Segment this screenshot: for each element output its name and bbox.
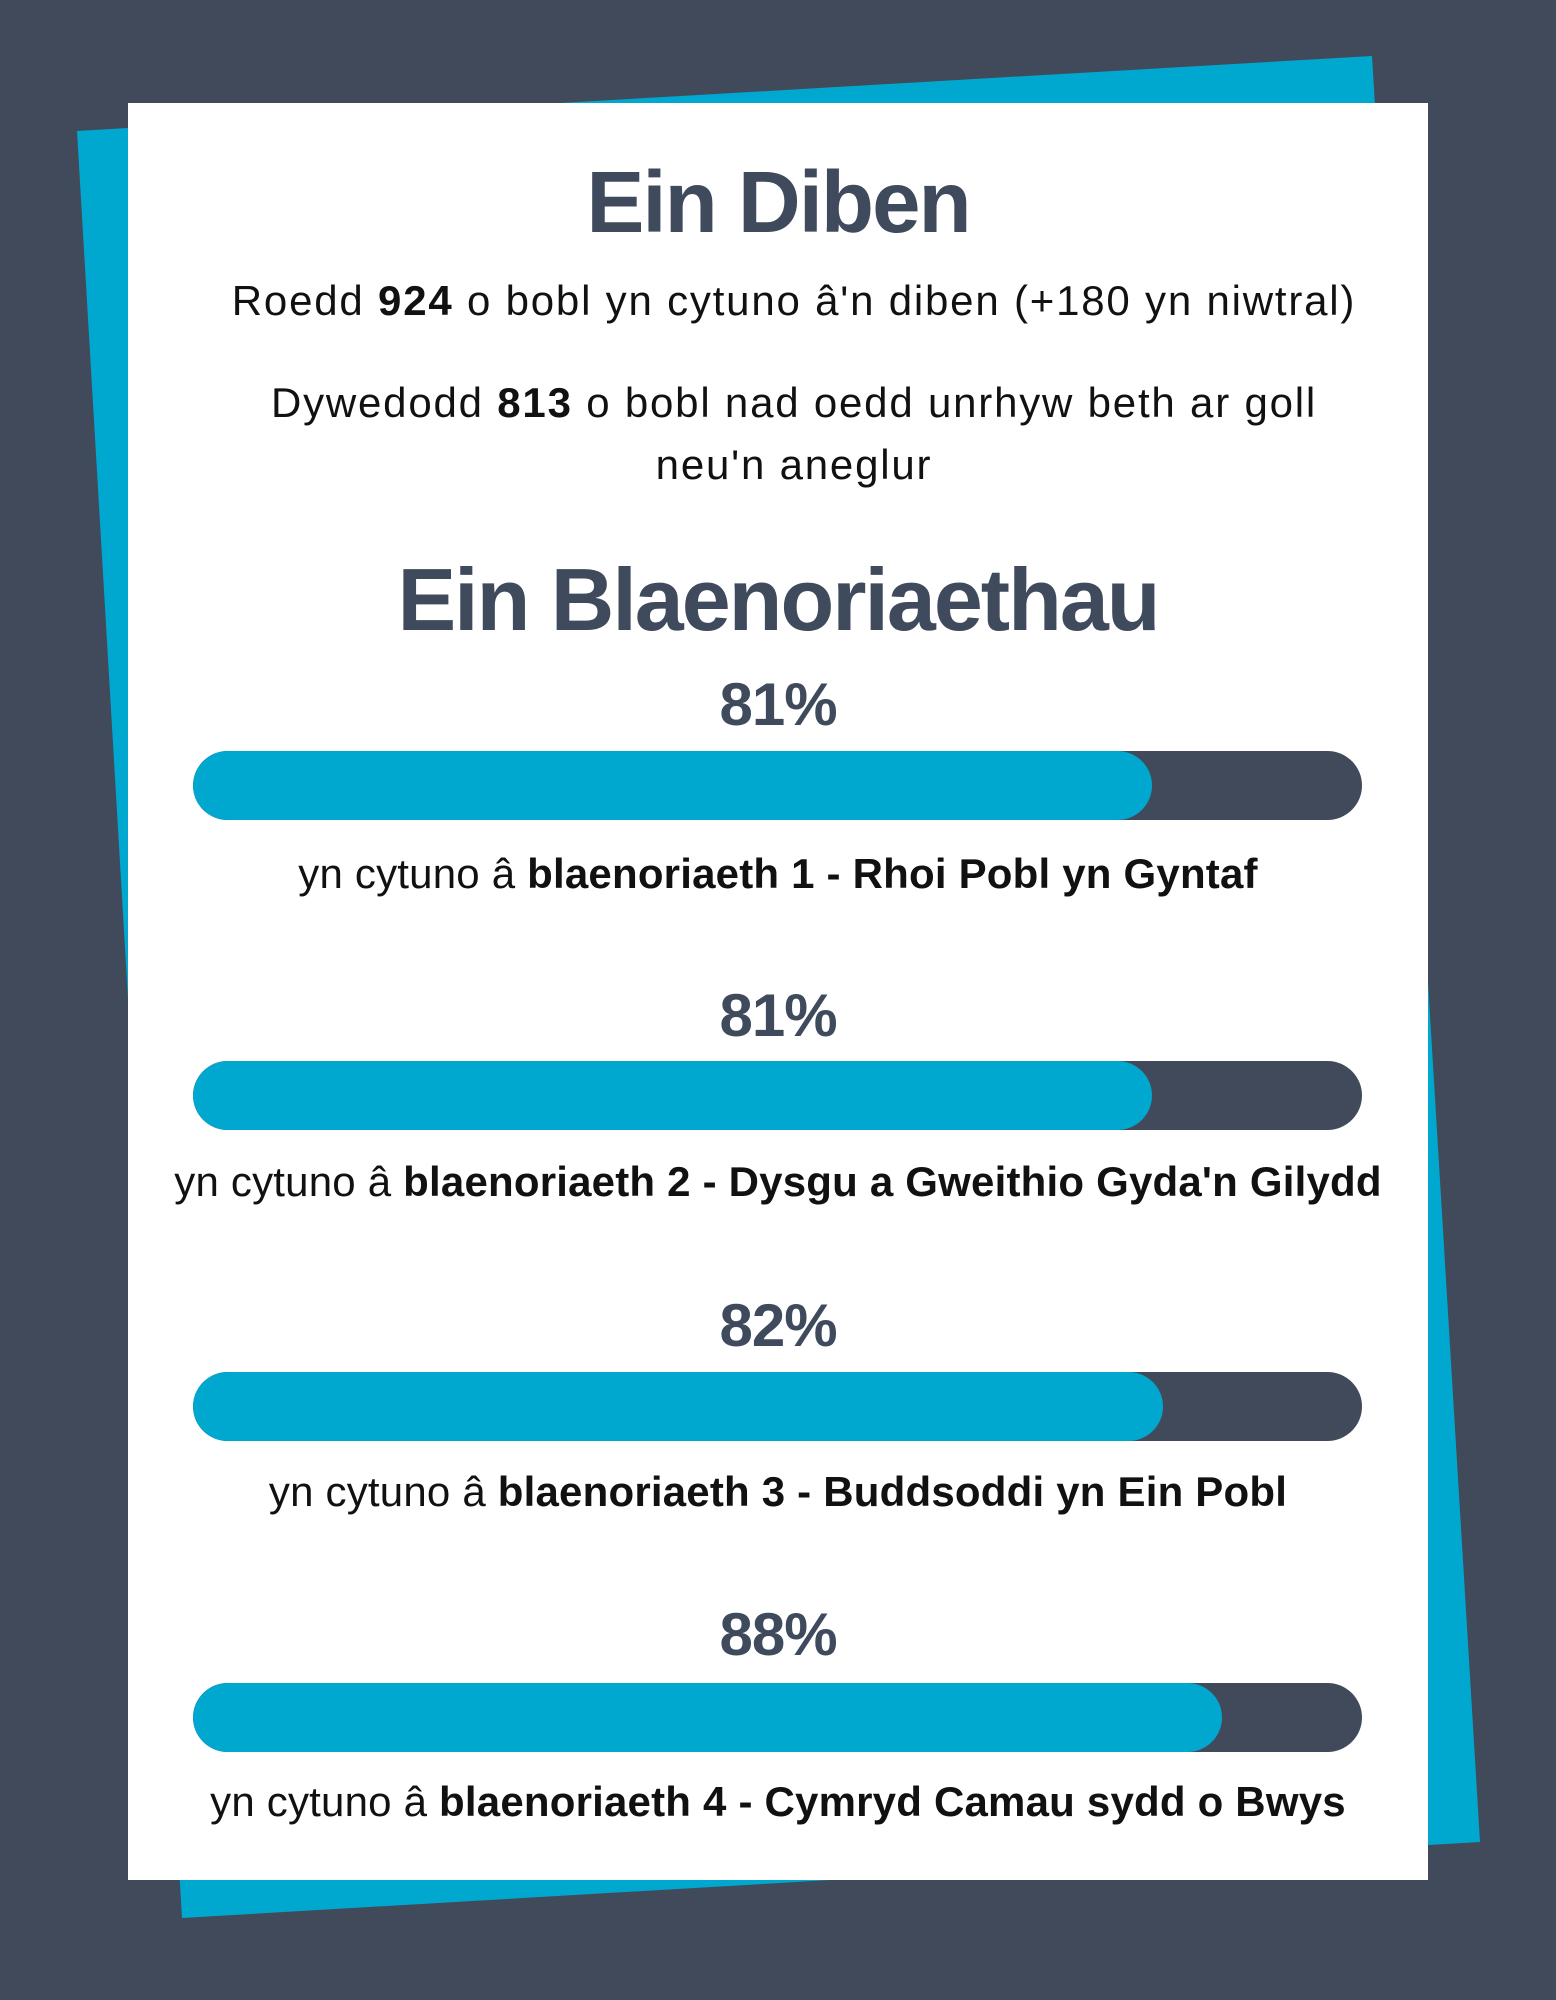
text: agree statistic: Roedd 924 o bobl yn cytuno â'n diben (+180 yn niwtral) — [232, 277, 1356, 324]
bar 82% — [193, 1372, 1362, 1441]
bar 81% — [193, 1061, 1362, 1130]
percentage 81%: 81% — [719, 982, 837, 1049]
priority 3 — [193, 1292, 1362, 1515]
percentage 81%: 81% — [719, 671, 837, 738]
label priority 4: yn cytuno â blaenoriaeth 4 - Cymryd Camau sydd o Bwys — [210, 1778, 1346, 1825]
priority 4 — [193, 1601, 1362, 1825]
title: Ein Diben: Ein Diben — [586, 154, 970, 251]
bar 88% — [193, 1683, 1362, 1752]
priority 2 — [174, 982, 1382, 1205]
bar 81% — [193, 751, 1362, 820]
label priority 1: yn cytuno â blaenoriaeth 1 - Rhoi Pobl yn Gyntaf — [298, 850, 1258, 897]
priority 1 — [193, 671, 1362, 897]
white card — [128, 103, 1428, 1880]
label priority 3: yn cytuno â blaenoriaeth 3 - Buddsoddi yn Ein Pobl — [269, 1468, 1287, 1515]
heading: Ein Blaenoriaethau: Ein Blaenoriaethau — [397, 550, 1159, 649]
percentage 88%: 88% — [719, 1601, 837, 1668]
label priority 2: yn cytuno â blaenoriaeth 2 - Dysgu a Gweithio Gyda'n Gilydd — [174, 1158, 1382, 1205]
text: nothing missing statistic — [271, 379, 1317, 488]
text: nothing missing statistic: neu'n aneglur — [656, 441, 932, 488]
text: nothing missing statistic: Dywedodd 813 o bobl nad oedd unrhyw beth ar goll — [271, 379, 1317, 426]
percentage 82%: 82% — [719, 1292, 837, 1359]
